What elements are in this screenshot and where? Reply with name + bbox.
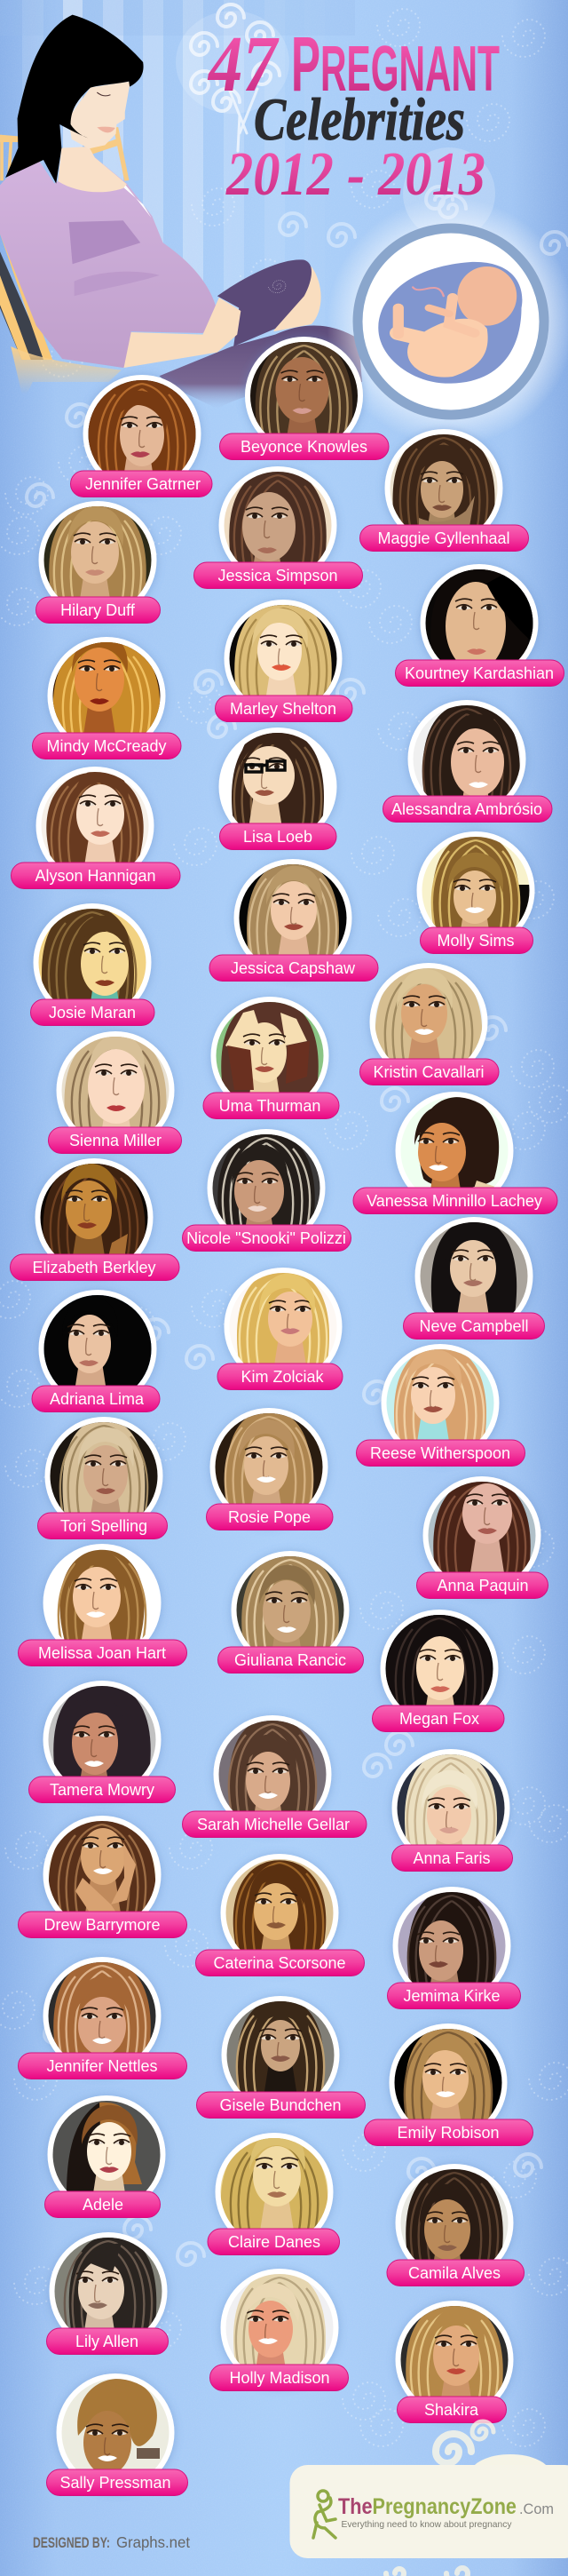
portrait: Sally Pressman <box>57 2373 174 2500</box>
name label: Jennifer Gatrner <box>85 475 201 493</box>
portrait: Jemima Kirke <box>392 1887 511 2007</box>
card: Kim Zolciak <box>217 1268 343 1389</box>
title <box>207 20 500 209</box>
fetus illustration in circle <box>327 197 568 446</box>
name label <box>32 733 181 759</box>
name label <box>48 1127 181 1153</box>
name label <box>403 1313 545 1340</box>
black hair <box>5 15 144 184</box>
card: Maggie Gyllenhaal <box>360 429 529 551</box>
card: Molly Sims <box>417 831 534 954</box>
portrait: Beyonce Knowles <box>241 335 367 433</box>
cream swirls around footer logo <box>386 2421 550 2576</box>
name label: Giuliana Rancic <box>234 1651 346 1669</box>
card: Nicole "Snooki" Polizzi <box>183 1129 351 1253</box>
card: Vanessa Minnillo Lachey <box>353 1092 557 1213</box>
card: Alyson Hannigan <box>11 767 180 888</box>
name label <box>208 2229 339 2254</box>
skin: chest, neck and face <box>58 147 127 192</box>
portrait: Sienna Miller <box>57 1031 174 1151</box>
portrait: Neve Campbell <box>415 1217 532 1337</box>
portrait: Maggie Gyllenhaal <box>382 426 506 524</box>
card: Jennifer Nettles <box>18 1957 186 2079</box>
portrait: Emily Robison <box>389 2023 508 2143</box>
portrait: Giuliana Rancic <box>231 1551 350 1671</box>
name label: Kourtney Kardashian <box>405 664 554 682</box>
name label <box>357 1440 525 1466</box>
name label: Nicole "Snooki" Polizzi <box>186 1229 346 1247</box>
name label: Marley Shelton <box>230 700 336 718</box>
name label: Sarah Michelle Gellar <box>197 1816 350 1833</box>
name label <box>220 433 389 460</box>
card: Caterina Scorsone <box>195 1854 364 1976</box>
leg and skirt <box>160 259 362 409</box>
name label: Melissa Joan Hart <box>38 1644 166 1662</box>
name label: Maggie Gyllenhaal <box>377 529 510 547</box>
name label <box>364 2119 532 2146</box>
icon: pregnant figure <box>313 2491 335 2538</box>
card: Marley Shelton <box>215 600 352 721</box>
title line: 2012 - 2013: 2012 - 2013 <box>225 140 485 209</box>
name label <box>195 1950 364 1976</box>
name label: Jennifer Nettles <box>46 2057 158 2075</box>
name label <box>183 1811 367 1837</box>
name label: Shakira <box>424 2401 479 2419</box>
name label: Adele <box>83 2196 123 2214</box>
portrait: Molly Sims <box>417 831 534 953</box>
portrait: Mindy McCready <box>44 634 169 732</box>
card: Adriana Lima <box>32 1290 160 1412</box>
designed by credit <box>33 2533 190 2551</box>
portrait: Nicole "Snooki" Polizzi <box>208 1129 325 1253</box>
name label <box>32 1386 160 1412</box>
card: Reese Witherspoon <box>357 1344 525 1466</box>
portrait: Gisele Bundchen <box>222 1996 339 2116</box>
name label <box>18 1912 186 1938</box>
background wall stripes <box>22 0 244 316</box>
card: Shakira <box>396 2301 513 2423</box>
name label: Elizabeth Berkley <box>32 1259 156 1276</box>
name label: Reese Witherspoon <box>370 1444 510 1462</box>
title line: Celebrities: Celebrities <box>254 85 465 153</box>
portrait: Jessica Capshaw <box>234 859 351 979</box>
portrait: Marley Shelton <box>221 597 345 695</box>
name label: Lisa Loeb <box>243 828 312 846</box>
name label: Uma Thurman <box>219 1097 320 1115</box>
name label: Beyonce Knowles <box>241 438 367 456</box>
portrait: Melissa Joan Hart <box>43 1544 162 1662</box>
portrait: Drew Barrymore <box>43 1816 162 1936</box>
name label: Molly Sims <box>437 932 515 950</box>
card: Sarah Michelle Gellar <box>183 1715 367 1840</box>
portrait: Josie Maran <box>34 903 151 1025</box>
name label: Kristin Cavallari <box>373 1063 485 1081</box>
name label: Tori Spelling <box>60 1517 147 1535</box>
name label <box>387 1983 520 2009</box>
portrait: Kim Zolciak <box>224 1268 343 1386</box>
card: Jennifer Gatrner <box>71 375 212 497</box>
name label <box>203 1093 339 1119</box>
card: Kristin Cavallari <box>360 963 499 1085</box>
portrait: Adele <box>48 2095 165 2214</box>
card: Kourtney Kardashian <box>396 564 564 693</box>
name label <box>387 2260 524 2286</box>
name label <box>183 1225 351 1251</box>
name label: Hilary Duff <box>60 601 136 619</box>
name label: Alyson Hannigan <box>35 867 156 885</box>
card: Neve Campbell <box>403 1217 545 1340</box>
title line: 47 Pregnant <box>207 20 500 108</box>
logo tagline: Everything need to know about pregnancy <box>341 2519 512 2530</box>
name label: Emily Robison <box>397 2124 500 2142</box>
portrait: Megan Fox <box>380 1610 499 1729</box>
name label <box>206 1504 333 1530</box>
portrait: Reese Witherspoon <box>382 1344 499 1464</box>
name label: Holly Madison <box>229 2369 330 2387</box>
card: Holly Madison <box>209 2269 348 2391</box>
portrait: Tori Spelling <box>44 1417 163 1537</box>
portrait: Uma Thurman <box>211 997 328 1117</box>
name label: Jessica Simpson <box>217 567 338 584</box>
card: Sally Pressman <box>46 2373 188 2500</box>
card: Melissa Joan Hart <box>18 1544 186 1666</box>
portrait: Hilary Duff <box>36 499 160 597</box>
name label: Lily Allen <box>75 2333 138 2350</box>
name label: Caterina Scorsone <box>213 1954 346 1972</box>
name label <box>18 2053 186 2079</box>
portrait: Kristin Cavallari <box>369 963 488 1083</box>
name label: Sally Pressman <box>59 2474 171 2492</box>
name label: Mindy McCready <box>46 737 167 755</box>
card: Giuliana Rancic <box>218 1551 364 1674</box>
name label <box>11 1254 179 1281</box>
name label: Kim Zolciak <box>241 1368 325 1386</box>
card: Mindy McCready <box>32 633 181 759</box>
name label <box>28 1777 176 1803</box>
card: Anna Faris <box>392 1749 513 1873</box>
name label: Alessandra Ambrósio <box>391 800 542 818</box>
title line: 47 Pregnant: P <box>291 21 320 107</box>
footer logo panel: ThePregnancyZone.Com <box>289 2465 568 2558</box>
rocking chair <box>0 127 127 394</box>
arm and hand <box>124 298 241 368</box>
portrait: Jessica Simpson <box>216 464 340 561</box>
name label <box>217 1364 343 1389</box>
portrait: Caterina Scorsone <box>220 1854 339 1972</box>
card: Adele <box>44 2095 165 2217</box>
portrait: Lisa Loeb <box>218 727 337 847</box>
name label <box>373 1705 504 1732</box>
card: Gisele Bundchen <box>197 1996 366 2118</box>
name label: Claire Danes <box>228 2233 320 2251</box>
card: Rosie Pope <box>206 1408 333 1530</box>
portrait: Jennifer Nettles <box>43 1957 162 2077</box>
card: Anna Paquin <box>417 1476 548 1599</box>
name label <box>417 1572 548 1599</box>
name label <box>396 660 564 686</box>
designed by credit: Graphs.net <box>116 2533 190 2551</box>
illustration: pregnant woman in rocking chair <box>0 15 362 409</box>
name label: Vanessa Minnillo Lachey <box>367 1192 542 1210</box>
portrait: Rosie Pope <box>209 1408 328 1528</box>
name label: Rosie Pope <box>228 1508 311 1526</box>
portrait: Shakira <box>396 2301 513 2421</box>
portrait: Elizabeth Berkley <box>36 1158 153 1278</box>
name label: Jemima Kirke <box>403 1987 501 2005</box>
name label <box>18 1640 186 1666</box>
card: Uma Thurman <box>203 997 339 1119</box>
name label: Gisele Bundchen <box>219 2096 342 2114</box>
card: Emily Robison <box>364 2023 532 2146</box>
card: Lisa Loeb <box>218 727 337 849</box>
card: Jemima Kirke <box>387 1887 520 2009</box>
name label: Drew Barrymore <box>43 1916 161 1934</box>
name label: Anna Faris <box>413 1849 491 1867</box>
name label <box>209 2365 348 2391</box>
card: Elizabeth Berkley <box>11 1158 179 1281</box>
designed by credit: DESIGNED BY: <box>33 2534 110 2551</box>
card: Hilary Duff <box>36 501 160 624</box>
card: Jessica Capshaw <box>209 859 378 981</box>
name label: Adriana Lima <box>50 1390 145 1408</box>
portrait: Claire Danes <box>215 2131 334 2253</box>
name label: Anna Paquin <box>437 1577 529 1594</box>
portrait: Sarah Michelle Gellar <box>213 1715 332 1840</box>
logo suffix: .Com <box>519 2500 554 2517</box>
name label: Jessica Capshaw <box>231 959 356 977</box>
name label <box>71 471 212 497</box>
name label <box>383 796 552 823</box>
name label: Megan Fox <box>399 1710 479 1728</box>
portrait: Alessandra Ambrósio <box>408 700 525 829</box>
name label: Camila Alves <box>408 2264 501 2282</box>
name label <box>37 1513 167 1538</box>
name label: Tamera Mowry <box>50 1781 154 1799</box>
card: Sienna Miller <box>48 1031 181 1153</box>
card: Tamera Mowry <box>28 1681 176 1805</box>
body in lilac top <box>0 157 219 368</box>
portrait: Anna Faris <box>392 1749 509 1873</box>
name label <box>215 696 352 721</box>
card: Camila Alves <box>387 2164 524 2288</box>
name label <box>11 863 180 888</box>
name label <box>197 2092 366 2118</box>
name label: Neve Campbell <box>419 1317 529 1335</box>
name label <box>193 562 362 588</box>
card: Beyonce Knowles <box>220 337 389 460</box>
portrait: Vanessa Minnillo Lachey <box>396 1092 513 1210</box>
portrait: Anna Paquin <box>422 1476 541 1596</box>
portrait: Jennifer Gatrner <box>80 373 204 471</box>
name label <box>353 1188 557 1213</box>
portrait: Camila Alves <box>396 2164 513 2288</box>
title line: 47 Pregnant: 47 <box>207 20 280 108</box>
name label <box>360 525 529 551</box>
portrait: Tamera Mowry <box>43 1681 162 1805</box>
portrait: Lily Allen <box>50 2232 167 2352</box>
name label <box>218 1647 364 1674</box>
card: Lily Allen <box>46 2232 169 2354</box>
card: Drew Barrymore <box>18 1816 186 1938</box>
portrait: Alyson Hannigan <box>36 767 154 885</box>
name label <box>46 2469 188 2496</box>
portrait: Kourtney Kardashian <box>417 561 540 659</box>
card: Jessica Simpson <box>193 466 362 591</box>
card: Alessandra Ambrósio <box>383 700 552 829</box>
card: Claire Danes <box>208 2131 339 2254</box>
name label: Sienna Miller <box>69 1132 162 1149</box>
name label <box>209 955 378 981</box>
portrait: Adriana Lima <box>39 1290 156 1410</box>
logo wordmark: ThePregnancyZone <box>338 2494 517 2519</box>
name label <box>360 1059 499 1085</box>
card: Tori Spelling <box>37 1417 167 1538</box>
portrait: Holly Madison <box>220 2269 339 2389</box>
ornament behind title <box>176 4 289 151</box>
card: Megan Fox <box>373 1610 504 1732</box>
name label: Josie Maran <box>49 1004 136 1022</box>
card: Josie Maran <box>30 903 154 1025</box>
